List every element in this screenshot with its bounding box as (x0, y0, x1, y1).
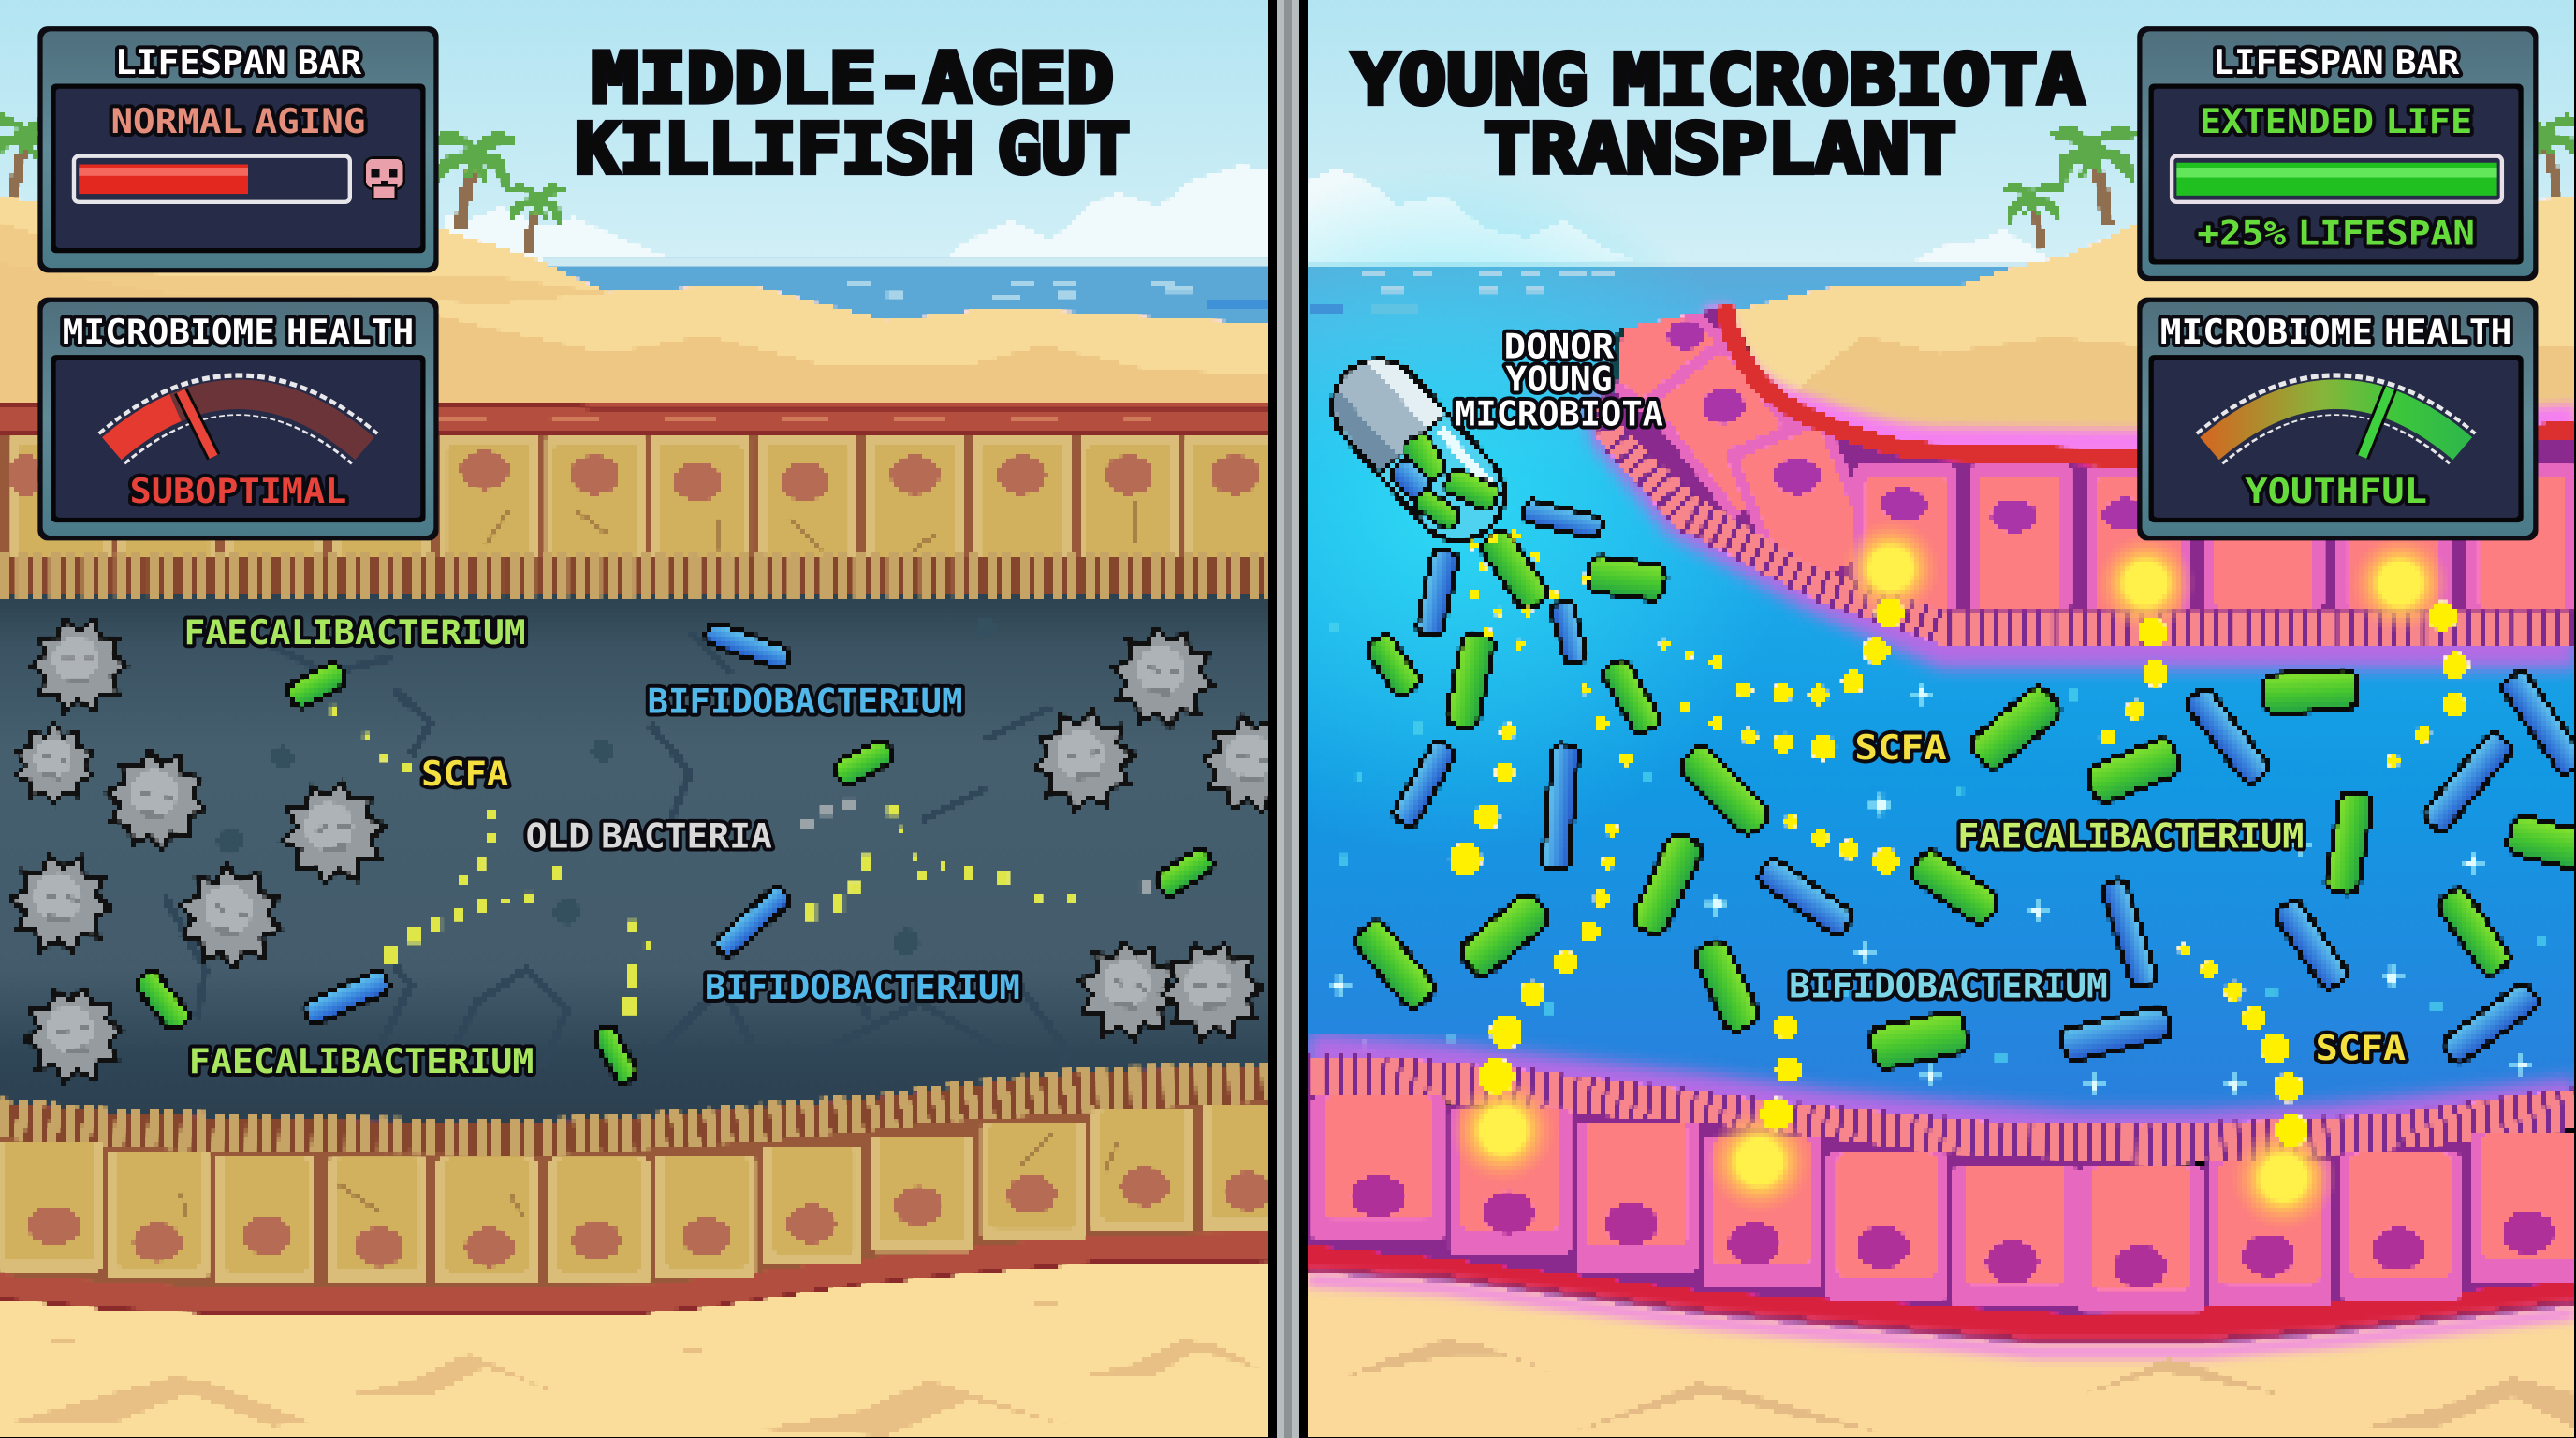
title: young microbiota transplant: TRANSPLANT (1484, 110, 1956, 189)
faint water speckles (1331, 624, 2548, 1062)
gauge: needle in green zone (2208, 388, 2464, 457)
panel heading: LIFESPAN BAR (115, 42, 362, 82)
left top epithelial cells (0, 431, 1284, 568)
status text: YOUTHFUL (2245, 471, 2427, 511)
label: SCFA, upper: SCFA (1854, 727, 1947, 768)
panel: lifespan bar, normal aging (37, 26, 439, 272)
left bottom villi (0, 1084, 1268, 1142)
left sand dunes (0, 197, 1268, 403)
title: middle-aged killifish gut (575, 39, 1130, 189)
right purple glow on villi (1308, 394, 2576, 1130)
labels: left scene (184, 612, 1020, 1081)
right bottom epithelial cells (1308, 1096, 2576, 1314)
title: young microbiota transplant (1352, 41, 2085, 189)
label: faecalibacterium: FAECALIBACTERIUM (1957, 816, 2304, 857)
right sparkles (1327, 682, 2533, 1096)
old bacteria cluster (4, 620, 1306, 1087)
lumen cracks (164, 637, 1053, 1020)
left sand foreground (0, 1262, 1270, 1438)
center divider (1268, 0, 1308, 1438)
label: donor young microbiota: YOUNG (1505, 360, 1613, 400)
gauge: needle in red zone (110, 391, 366, 457)
panel heading: MICROBIOME HEALTH (63, 312, 414, 352)
bright SCFA dot streams (1449, 531, 2469, 1147)
label: bifidobacterium, top: BIFIDOBACTERIUM (647, 682, 962, 722)
panel: microbiome health, suboptimal (37, 298, 439, 540)
panel: lifespan bar, extended life (2137, 26, 2538, 281)
label: bifidobacterium, bottom: BIFIDOBACTERIUM (705, 967, 1020, 1007)
right bottom villi (1308, 1077, 2576, 1145)
title: middle-aged killifish gut: KILLIFISH GUT (575, 110, 1130, 189)
lifespan bar: full (2172, 156, 2502, 202)
right clouds (1308, 168, 2043, 263)
panel: microbiome health, youthful (2137, 298, 2538, 540)
left sky (0, 0, 1270, 271)
right sea and lumen (1101, 165, 2576, 1150)
title: young microbiota transplant: YOUNG MICROBIOTA (1352, 41, 2085, 121)
label: faecalibacterium, top: FAECALIBACTERIUM (184, 612, 526, 653)
right sand dunes (1732, 198, 2576, 468)
left palm trees (0, 116, 564, 252)
lumen dark blotches (215, 740, 917, 955)
right sky (1308, 0, 2576, 271)
blue bifidobacterium, right (1391, 498, 2576, 1066)
label: donor young microbiota: MICROBIOTA (1455, 394, 1663, 434)
lifespan gain: +25% LIFESPAN (2197, 213, 2475, 253)
status text: EXTENDED LIFE (2200, 101, 2472, 141)
label: SCFA: SCFA (421, 754, 508, 794)
green faecalibacterium, left (133, 660, 1217, 1086)
pink glow above top wall (1717, 305, 2576, 444)
left scene: middle-aged killifish gut (0, 0, 1306, 1438)
title: middle-aged killifish gut: MIDDLE-AGED (592, 39, 1114, 119)
status text: NORMAL AGING (110, 101, 365, 141)
fading gray SCFA dots, left (801, 799, 1153, 892)
left top villi (0, 575, 1270, 577)
glowing SCFA absorption in cells (1451, 520, 2450, 1230)
left bottom gut wall (0, 1158, 1268, 1314)
right bottom gut wall (1308, 1150, 2576, 1351)
right top gut wall (1725, 305, 2576, 459)
label: donor young microbiota: DONOR (1504, 327, 1615, 367)
label: bifidobacterium: BIFIDOBACTERIUM (1789, 965, 2108, 1005)
status text: SUBOPTIMAL (130, 471, 346, 511)
blue bifidobacterium, left (301, 621, 793, 1027)
right top epithelial cells (1577, 273, 2576, 616)
green faecalibacterium, right (1350, 527, 2576, 1071)
right top villi (1606, 394, 2576, 624)
panel heading: MICROBIOME HEALTH (2160, 312, 2511, 352)
left top gut wall (0, 403, 1268, 431)
label: donor young microbiota (1455, 327, 1663, 434)
lifespan bar: about 60 percent (74, 156, 350, 202)
label: old bacteria: OLD BACTERIA (526, 816, 772, 857)
left bottom epithelial cells (0, 1101, 1273, 1288)
right palm trees (2005, 116, 2576, 250)
label: faecalibacterium, bottom: FAECALIBACTERIUM (189, 1041, 534, 1081)
capsule with donor microbiota (1314, 342, 1523, 559)
right sand foreground (1308, 1273, 2576, 1438)
labels: right scene (1455, 327, 2406, 1068)
panel heading: LIFESPAN BAR (2213, 42, 2460, 82)
right scene: young microbiota transplant (1101, 0, 2576, 1438)
left lumen (0, 566, 1270, 1134)
faint SCFA dots, left (330, 705, 1075, 1014)
left clouds (444, 165, 1268, 263)
label: SCFA, lower: SCFA (2316, 1028, 2406, 1068)
icon: skull (365, 157, 404, 198)
left sea (543, 257, 1268, 323)
